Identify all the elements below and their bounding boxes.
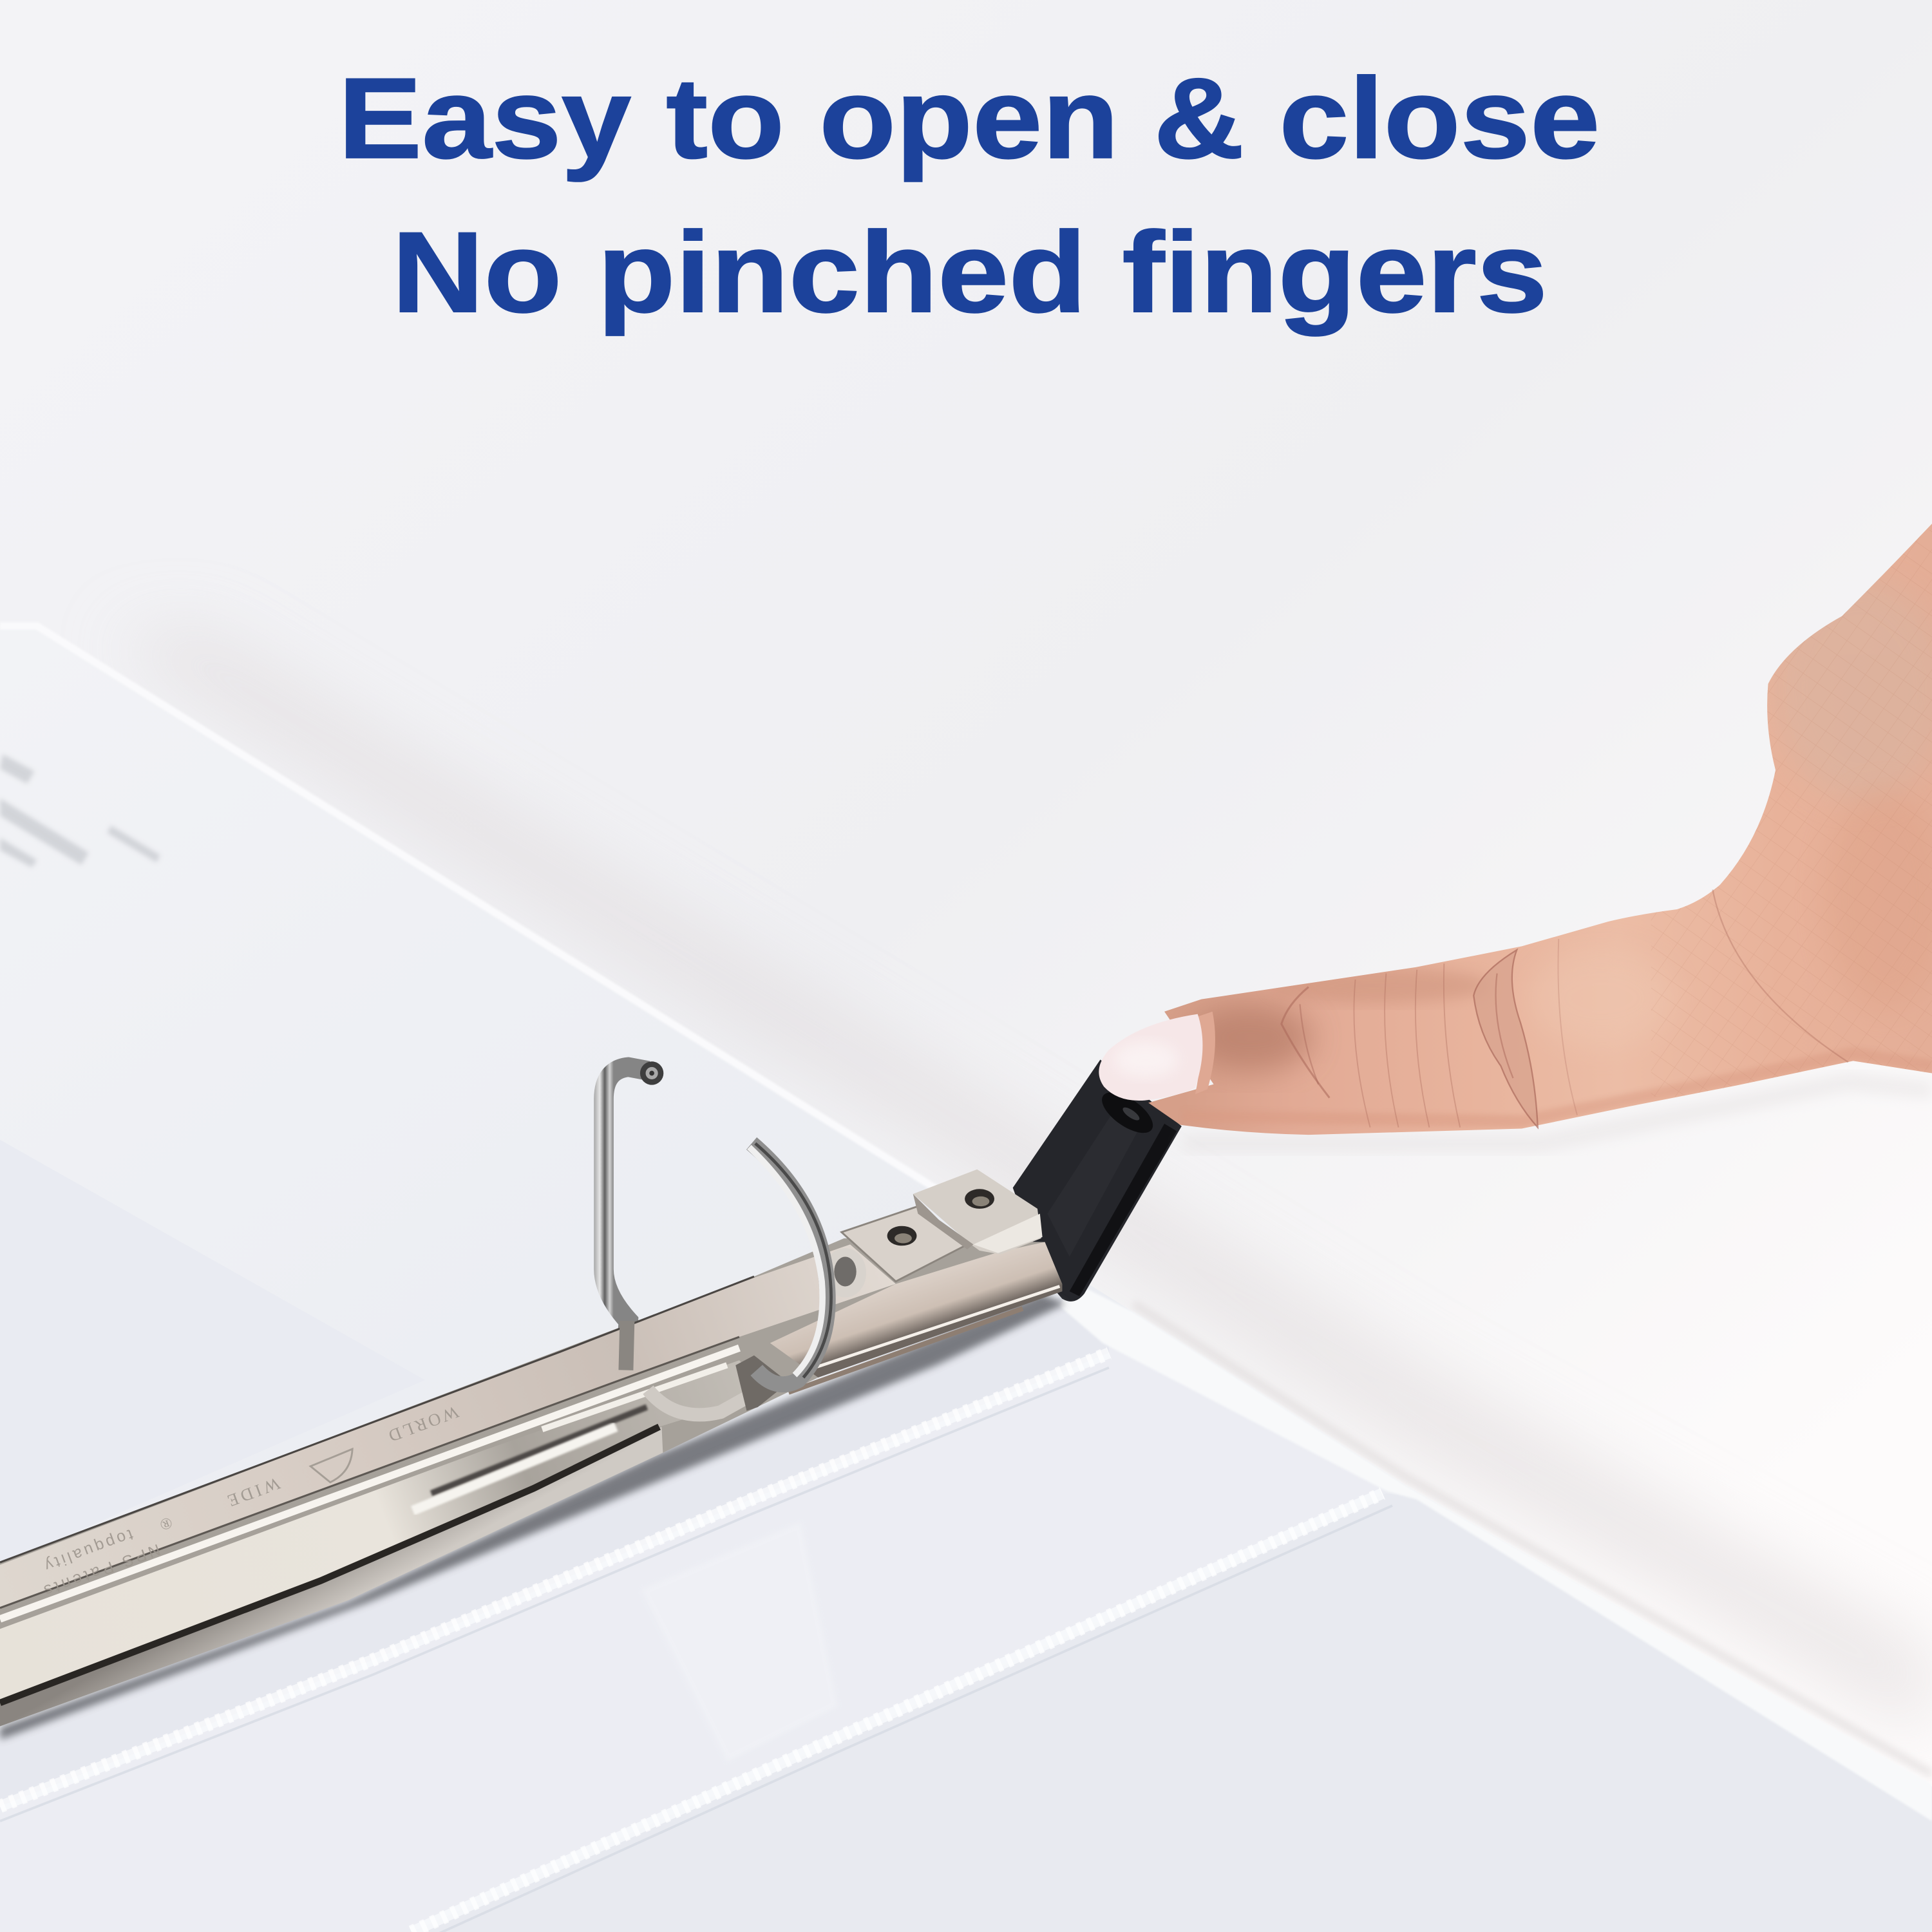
D ring post back [604,1067,648,1370]
skin shading [1183,530,1932,1121]
binder cover [0,626,1932,1932]
metal rail lower band [0,1427,663,1726]
ring mechanism [0,1061,1066,1740]
engraved brand text: topquality [40,1526,135,1576]
rail flat top band [0,1244,896,1608]
hand shadow on surface [1183,1082,1932,1144]
pocket weld seam upper [0,1353,1109,1821]
clear pockets [0,1341,1386,1932]
black lever [1013,1059,1182,1302]
faint printed insert text [0,754,160,867]
screw [824,1248,866,1298]
curved ring [749,1144,831,1385]
rail end face [770,1242,1062,1378]
mechanism shadow [0,1294,1066,1740]
engraved brand text: ® [157,1513,175,1533]
engraved shield logo [310,1449,352,1482]
rail cream tube and chrome [0,1360,770,1703]
pocket weld seam lower [412,1493,1392,1932]
D ring post base [626,1321,627,1370]
lower bracket plate with hole [842,1206,970,1282]
title: Easy to open & close [338,54,1600,182]
hand and finger [1099,524,1932,1144]
engraved brand text [39,1402,461,1601]
inner cover sheet [0,1140,425,1565]
engraved brand text: NPS Patents [39,1540,163,1601]
D ring end cap [640,1061,663,1085]
skin silhouette [1148,524,1932,1135]
knuckle creases [1282,889,1848,1128]
fingernail [1099,1012,1215,1101]
ring slot tab [735,1356,788,1411]
metal rail base [0,1238,1062,1726]
lower hook arc [648,1390,752,1415]
white binder edge band [1059,1282,1932,1821]
title [338,54,1600,336]
binder cast shadow [111,629,1932,1738]
title: No pinched fingers [392,208,1548,336]
engraved brand text: WORLD [384,1402,461,1446]
rail dark streak [0,1427,659,1703]
engraved brand text: WIDE [222,1473,283,1512]
upper bracket plate with hole [913,1170,1043,1255]
